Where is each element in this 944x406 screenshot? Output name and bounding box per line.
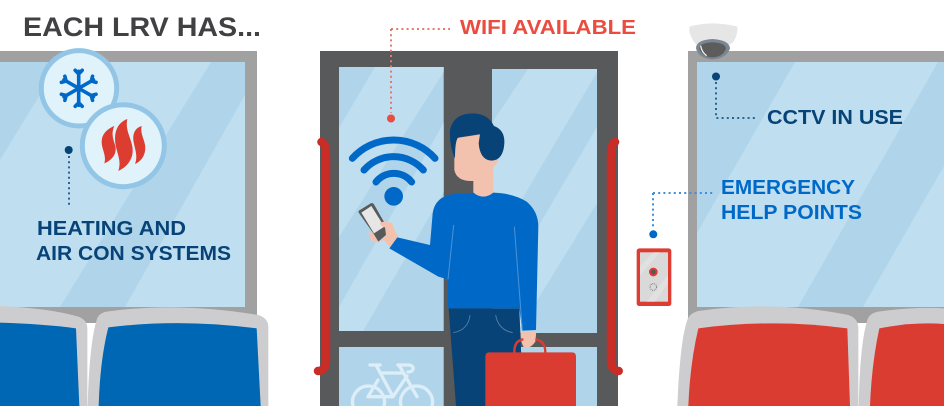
icon: snowflake badge [41,51,117,126]
door window: lower left with bicycle [339,347,444,406]
door handle: right [611,142,619,371]
title: EACH LRV HAS... [23,12,261,42]
neck and face [454,133,498,197]
text: cctv in use: CCTV IN USE [767,107,903,129]
icon: heating badge [82,105,164,187]
phone and hand [358,203,398,248]
panel: left window [0,51,257,323]
bag [485,339,576,406]
bag hand [521,331,536,348]
panel: right window [688,51,944,323]
door window: upper right [492,69,597,333]
icon: wifi [352,140,435,206]
callout line: cctv [712,72,758,118]
door handle: left [318,142,326,371]
panel: door [320,51,618,406]
text: heating and air con systems: HEATING AND [37,218,186,240]
callout line: emergency help points [649,193,714,238]
sweater [389,193,538,331]
right seats [677,306,944,406]
left seats [0,306,268,406]
text: emergency help points: EMERGENCY [721,177,856,199]
text: heating and air con systems [36,218,231,265]
callout line: wifi [387,29,450,122]
jeans [449,308,523,406]
text: heating and air con systems: AIR CON SYSTEMS [36,243,231,265]
text: wifi available: WIFI AVAILABLE [460,17,636,39]
hair [450,113,504,161]
text: emergency help points: HELP POINTS [721,202,862,224]
person with phone and bag [358,113,576,406]
door window: upper left [339,67,444,331]
door window: lower right [492,347,597,406]
icon: cctv camera [689,23,737,59]
text: emergency help points [721,177,862,224]
callout line: heating and air con [65,146,73,208]
icon: emergency help point [637,248,671,306]
